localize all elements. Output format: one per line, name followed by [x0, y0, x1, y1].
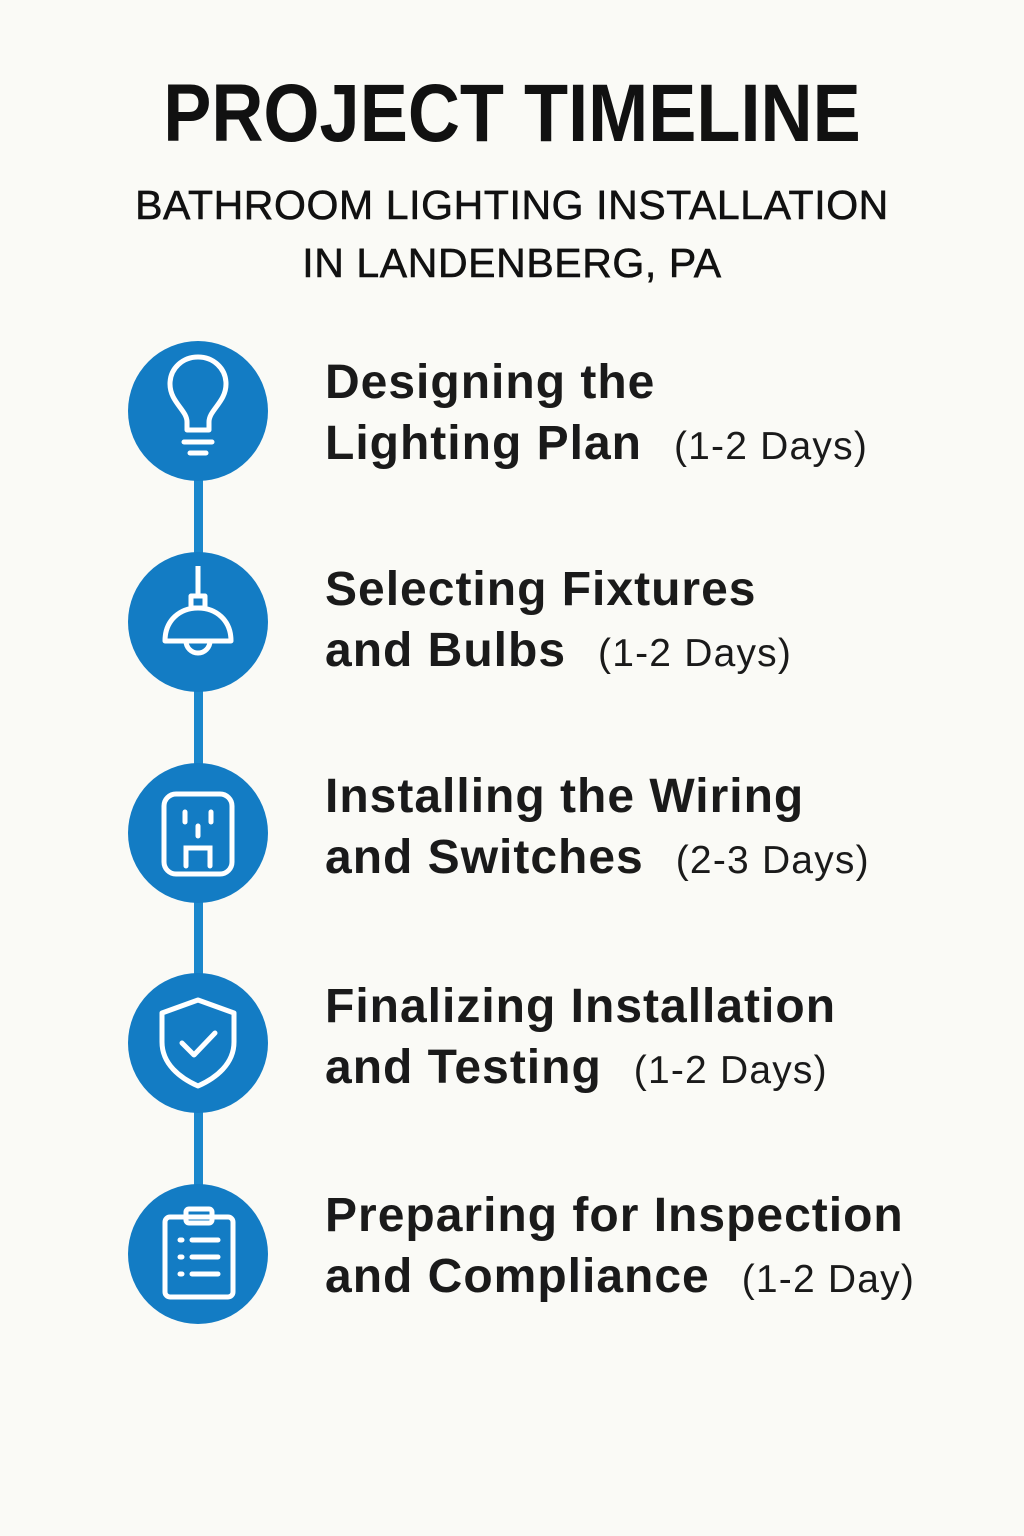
subtitle: IN LANDENBERG, PA: [302, 240, 722, 286]
step 5 text: Preparing for Inspection: [325, 1189, 904, 1242]
step 2 text: Selecting Fixtures: [325, 563, 756, 616]
step 1 text: [325, 356, 868, 470]
step 2 text: and Bulbs (1-2 Days): [325, 624, 792, 677]
step 1 text: Lighting Plan (1-2 Days): [325, 417, 868, 470]
step 1 text: Designing the: [325, 356, 655, 409]
icon: pendant lamp: [128, 552, 268, 692]
icon: outlet: [128, 763, 268, 903]
step 4 text: Finalizing Installation: [325, 980, 836, 1033]
connector line: [194, 470, 203, 1200]
step 4 text: and Testing (1-2 Days): [325, 1041, 828, 1094]
step 5 text: [325, 1189, 915, 1303]
step 3 text: and Switches (2-3 Days): [325, 831, 870, 884]
subtitle: BATHROOM LIGHTING INSTALLATION: [135, 182, 889, 228]
step 4 text: [325, 980, 836, 1094]
step 3 text: [325, 770, 870, 884]
icon: shield check: [128, 973, 268, 1113]
icon: clipboard: [128, 1184, 268, 1324]
subtitle: [135, 182, 889, 286]
title: PROJECT TIMELINE: [163, 68, 861, 159]
step 3 text: Installing the Wiring: [325, 770, 804, 823]
step 5 text: and Compliance (1-2 Day): [325, 1250, 915, 1303]
step 2 text: [325, 563, 792, 677]
icon: light bulb: [128, 341, 268, 481]
